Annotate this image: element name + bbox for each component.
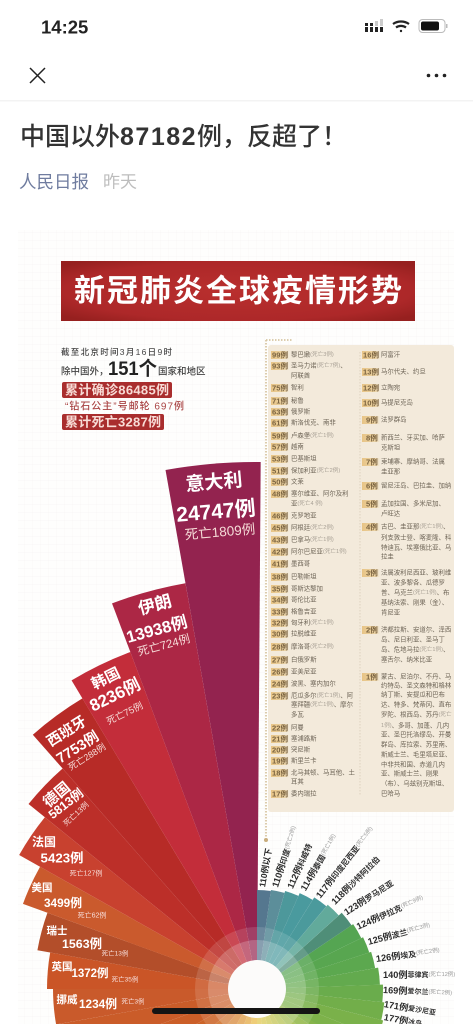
banner title: 新冠肺炎全球疫情形势 [74,274,402,308]
left column: 24例 [272,678,288,688]
right column: 3例 [366,568,378,578]
right column: 马尔代夫、约旦 [381,366,426,376]
left column: 塞拜疆(死亡1例)、摩尔 [291,700,354,708]
country count: 除中国外， [61,366,109,378]
label: South Korea: 韩国 [88,664,123,693]
left column: 阿联酋 [291,370,311,380]
left column: 多瓦 [291,710,304,718]
left column: 格鲁吉亚 [291,606,317,616]
left column: 匈牙利(死亡1例) [291,618,334,626]
right column: 拉圭 [381,552,394,560]
left column: 智利 [291,382,304,392]
right column: 立陶宛 [381,382,401,392]
left column: 35例 [272,584,288,594]
right column: 5例 [366,498,378,508]
right column: 卢旺达 [381,508,401,518]
left column: 厄瓜多尔(死亡1例)、阿 [291,690,354,700]
nav bar [30,68,446,83]
left column: 45例 [272,522,288,532]
right column: 1例 [366,672,378,682]
left column: 93例 [272,360,288,370]
right column: 达、特多、梵蒂冈、直布 [381,700,452,708]
chart: rose chart [16,461,455,1024]
banner [61,261,415,321]
right column: 13例 [363,366,379,376]
right column: 4例 [366,522,378,532]
summary block: 151个 [108,358,157,380]
right column: 6例 [366,480,378,490]
label: South Korea: 死亡75例 [105,700,145,728]
left column: 26例 [272,666,288,676]
right column: 基纳法索、刚果（金）、 [381,598,448,606]
labels: green side countries: 110例以下 [257,847,274,888]
left column: 亚美尼亚 [291,666,317,676]
right column: 阿富汗 [381,350,401,358]
right column: 岛、危地马拉(死亡1例)、 [381,644,449,654]
right column: 8例 [366,432,378,442]
left column: 亚(死亡4 例) [291,499,323,508]
left column: 30例 [272,628,288,638]
left column: 文莱 [291,476,304,486]
left column: 摩洛哥(死亡2例) [291,642,334,650]
right column: 斯威士兰、毛里塔尼亚、 [381,750,451,758]
article date: 昨天 [103,172,137,192]
labels: green side countries [257,824,455,1024]
label: Norway: 死亡3例 [121,996,145,1006]
label: Iran: 伊朗 [136,591,174,619]
article title: 中国以外87182例，反超了！ [20,123,347,151]
left column: 17例 [272,788,288,798]
left column: 38例 [272,572,288,582]
right column: 岛、尼日利亚、圣马丁 [381,634,445,644]
left column: 斯洛伐克、南非 [291,418,336,426]
right column: 7例 [366,456,378,466]
left column: 北马其顿、马耳他、土 [291,768,356,776]
left column: 巴基斯坦 [291,454,317,462]
left column: 圣马力诺(死亡7例)、 [291,360,347,370]
label: USA: 死亡62例 [78,910,106,920]
left column: 塞浦路斯 [291,734,317,742]
left column: 43例 [272,534,288,544]
label: Switzerland: 死亡13例 [102,948,128,958]
left column: 秘鲁 [291,396,304,404]
label: France: 法国 [32,834,56,849]
right column: 12例 [363,382,379,392]
right column: 列支敦士登、喀麦隆、科 [381,532,452,542]
left column: 墨西哥 [291,560,311,568]
left column: 71例 [272,396,288,406]
right column: 柬埔寨、摩纳哥、法属 [381,456,445,466]
label: Iran [124,591,191,659]
right column [362,350,452,798]
labels: green side countries: 126例埃及(死亡2例) [375,945,440,964]
label: Italy: 意大利 [185,468,243,496]
label: USA: 美国 [32,881,52,894]
label: Norway: 挪威 [56,993,78,1006]
left column: 61例 [272,418,288,428]
label: Norway: 1234例 [79,997,117,1011]
left column: 哥伦比亚 [291,594,317,604]
left column: 63例 [272,406,288,416]
icon: more [427,74,446,77]
wedges: orange and yellow lower part [56,989,292,1024]
labels: green side countries: 124例伊拉克(死亡9例) [355,892,425,932]
left column [271,350,356,798]
label: Germany: 死亡13例 [61,799,91,828]
right column: 法属波利尼西亚、玻利维 [381,568,452,576]
label: Italy: 24747例 [175,497,257,527]
label: Iran: 13938例 [124,612,189,647]
status time: 14:25 [41,16,88,38]
left column: 阿根廷(死亡2例) [291,522,334,532]
left column: 48例 [272,488,288,498]
right column: 群岛、库拉索、苏里南、 [381,740,451,748]
label: Germany [39,778,91,828]
right column: （布）、乌兹别克斯坦、 [381,778,448,788]
right column: 巴哈马 [381,788,400,798]
label: USA [32,881,106,920]
summary block [61,347,206,430]
left column: 突尼斯 [291,744,311,754]
wedge: Spain [30,698,257,1021]
label: USA: 3499例 [44,896,82,910]
left column: 哥斯达黎加 [291,584,323,592]
left column: 20例 [272,744,288,754]
wedge: USA [20,867,257,1024]
right column: 孟加拉国、多米尼加、 [381,498,445,508]
wedge: Switzerland [34,913,257,1024]
left column: 21例 [272,734,288,744]
left column: 斯里兰卡 [291,756,317,764]
left column: 巴拿马(死亡1例) [291,534,334,544]
home indicator [152,1008,320,1014]
label: Iran: 死亡724例 [136,631,191,659]
right column: 亚、波多黎各、瓜德罗 [381,578,445,586]
label: South Korea [87,664,145,728]
left column: 34例 [272,594,288,604]
wedges: green side [239,890,384,1024]
labels: green side countries: 118例沙特阿拉伯 [329,853,382,907]
left column: 克罗地亚 [291,510,317,520]
right column: 蒙古、尼泊尔、不丹、马 [381,672,451,680]
left column: 巴勒斯坦 [291,572,317,580]
labels: green side countries: 140例菲律宾(死亡12例) [383,969,455,980]
label: Germany: 5813例 [45,785,86,822]
right column: 古巴、圭亚那(死亡1例)、 [381,522,449,530]
label: France: 5423例 [41,850,83,866]
labels: green side countries: 110例印度(死亡2例) [269,824,299,889]
left column: 越南 [291,442,304,450]
left column: 23例 [272,690,288,700]
labels: green side countries: 117例印度尼西亚(死亡5例) [313,824,376,900]
left column: 32例 [272,618,288,628]
left column: 耳其 [291,778,304,786]
right column: 留尼汪岛、巴拉圭、加纳 [381,480,451,490]
icon: wifi [393,21,409,32]
summary block: 国家和地区 [158,366,206,378]
right column: 法罗群岛 [381,414,407,424]
confirmed tag: 累计确诊86485例 [65,382,169,398]
right column: 普、乌克兰(死亡1例)、布 [381,588,450,596]
cruise line: “钻石公主”号邮轮 697例 [65,400,184,412]
left column: 51例 [272,466,288,476]
left column: 41例 [272,558,288,568]
wedge: France [16,817,257,1024]
right column: 洪都拉斯、安道尔、泽西 [381,624,451,634]
label: Switzerland [46,924,128,958]
left column: 28例 [272,642,288,652]
icon: close [30,68,45,83]
left column: 阿曼 [291,722,304,732]
wedge: Iran [111,583,257,1002]
right column: 肯尼亚 [381,608,401,616]
status bar [41,16,448,38]
label: Spain: 死亡288例 [66,741,107,772]
left column: 委内瑞拉 [291,788,317,798]
label: Italy [175,468,257,543]
right column: 圭亚那 [381,466,401,476]
left column: 57例 [272,442,288,452]
right column: 10例 [363,398,379,408]
label: UK [52,960,138,984]
label: Germany: 德国 [39,778,74,811]
wedge: Italy [162,461,261,989]
label: Spain: 7753例 [53,728,102,767]
label: Spain [44,713,107,772]
left column: 50例 [272,476,288,486]
death tag: 累计死亡3287例 [65,414,161,430]
right column: 1例)、多哥、加蓬、几内 [381,720,449,730]
label: Italy: 死亡1809例 [184,521,256,543]
wedge: South Korea [69,652,257,1012]
right column: 新西兰、牙买加、哈萨 [381,432,446,442]
right column: 纳丁斯、安提瓜和巴布 [381,690,446,698]
wedge: Norway [53,989,257,1024]
right column: 9例 [366,414,378,424]
right column: 罗陀、根西岛、苏丹(死亡 [381,710,452,718]
left column: 99例 [272,350,288,360]
left column: 阿尔巴尼亚(死亡1例) [291,546,347,556]
right column: 约特岛、圣文森特和格林 [381,680,452,690]
left column: 46例 [272,510,288,520]
label: France: 死亡127例 [70,868,102,878]
label: UK: 1372例 [71,966,109,980]
right column: 亚、圣巴托洛缪岛、开曼 [381,730,452,738]
left column: 保加利亚(死亡2例) [291,466,340,474]
left column: 拉脱维亚 [291,628,317,638]
left column: 27例 [272,654,288,664]
left column: 塞尔维亚、阿尔及利 [291,488,349,498]
icon: signal [365,19,383,32]
label: Norway [56,993,145,1011]
wedge: UK [44,953,257,1024]
labels: green side countries: 112例科威特 [285,842,314,890]
left column: 75例 [272,382,288,392]
rings and centre hole [195,927,319,1024]
left column: 白俄罗斯 [291,654,317,664]
left column: 59例 [272,430,288,440]
label: Switzerland: 1563例 [62,936,102,951]
label: South Korea: 8236例 [87,675,143,715]
right column: 特迪瓦、埃塞俄比亚、乌 [381,542,451,552]
icon: battery [419,20,448,32]
article source: 人民日报 [19,172,89,192]
right column: 亚、斯威士兰、刚果 [381,768,439,778]
label: Switzerland: 瑞士 [46,924,68,937]
date line: 截至北京时间3月16日9时 [61,347,172,357]
labels: green side countries: 125例波兰(死亡3例) [366,920,431,947]
left column: 波黑、塞内加尔 [291,678,336,688]
left column: 19例 [272,756,288,766]
infographic background [18,230,454,1024]
right column: 2例 [366,624,378,634]
panel: country list [264,340,454,842]
labels: green side countries: 169例爱尔兰(死亡2例) [383,984,453,999]
left column: 22例 [272,722,288,732]
right column: 16例 [363,350,379,360]
label: Spain: 西班牙 [44,713,90,750]
labels: green side countries: 123例罗马尼亚 [342,877,395,917]
label: UK: 死亡35例 [112,974,138,984]
left column: 黎巴嫩(死亡3例) [291,350,334,358]
labels: green side countries: 114例泰国(死亡1例) [298,832,339,892]
label: France [32,834,102,878]
left column: 33例 [272,606,288,616]
left column: 卢森堡(死亡1例) [291,430,334,440]
wedge: Germany [26,768,257,1021]
labels: green side countries: 171例爱沙尼亚 [383,998,437,1018]
left column: 俄罗斯 [291,406,311,416]
label: UK: 英国 [52,960,72,973]
left column: 18例 [272,768,288,778]
right column: 马提尼克岛 [381,398,413,406]
left column: 53例 [272,454,288,464]
right column: 塞舌尔、纳米比亚 [381,654,433,664]
left column: 42例 [272,546,288,556]
right column: 中非共和国、赤道几内 [381,760,445,768]
right column: 克斯坦 [381,442,401,452]
